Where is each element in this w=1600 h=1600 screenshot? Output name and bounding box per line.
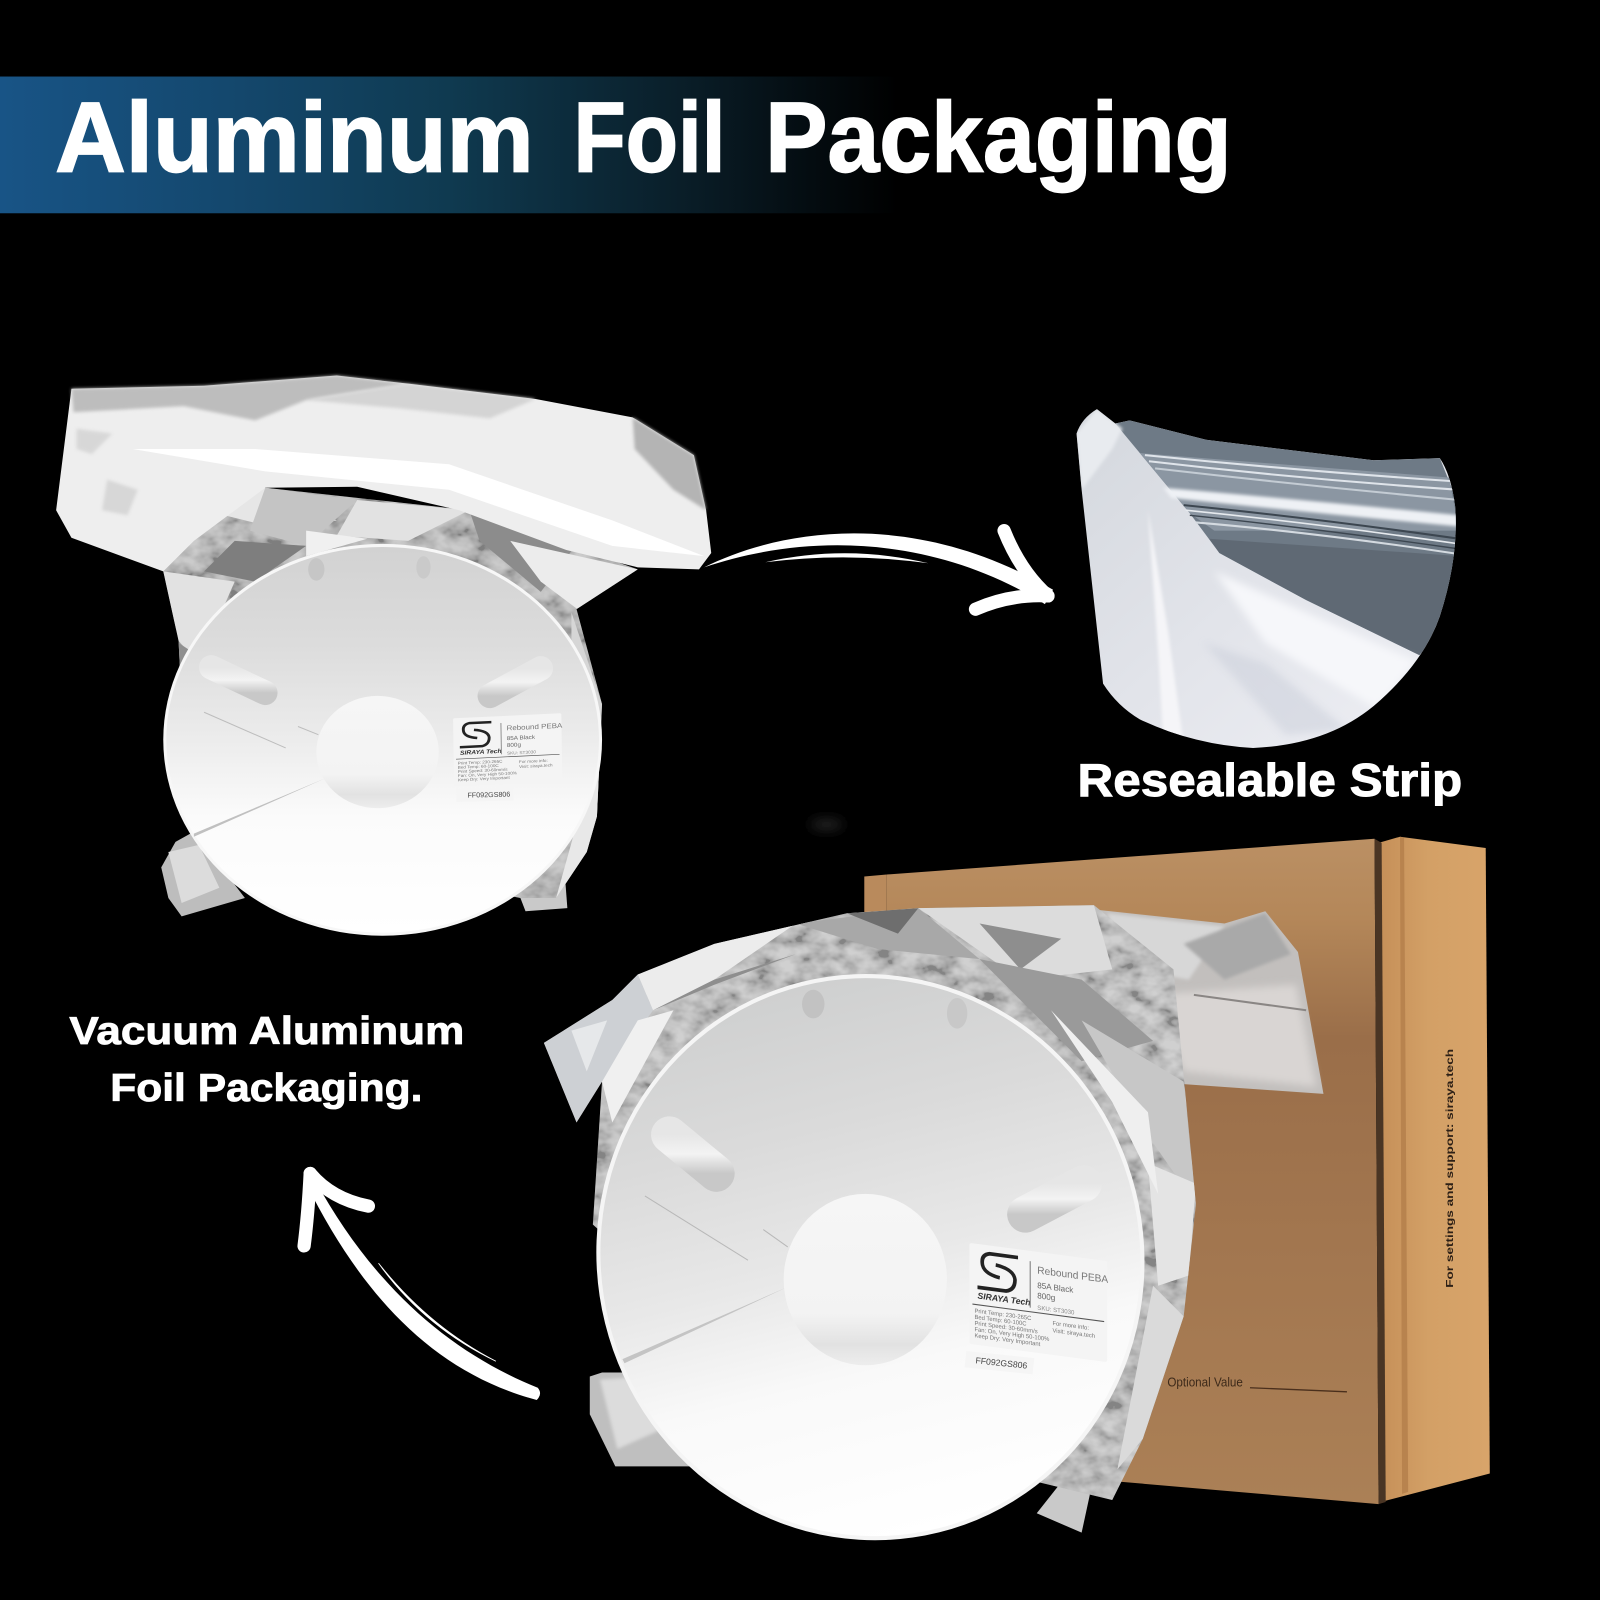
spool label: Visit: siraya.tech — [1052, 1328, 1095, 1340]
spool label: For more info: — [519, 758, 548, 764]
spool disc — [163, 544, 602, 936]
box side text: For settings and support: siraya.tech — [1445, 1049, 1456, 1288]
foil bottom tabs — [161, 832, 567, 916]
title: Foil — [573, 81, 726, 192]
batch sticker — [965, 1351, 1034, 1374]
spool label: Keep Dry: Very Important — [974, 1333, 1041, 1348]
spool label: Print Temp: 230-265C — [974, 1309, 1032, 1322]
crinkled foil body — [163, 488, 638, 898]
arrow: bag to resealable strip — [704, 531, 1053, 609]
spool label — [453, 713, 563, 786]
disc hub — [316, 696, 439, 808]
spool label: Rebound PEBA — [1037, 1265, 1108, 1286]
spool label: Print Speed: 30-60mm/s — [974, 1321, 1038, 1335]
spool label: Visit: siraya.tech — [519, 763, 553, 769]
caption: resealable strip: Resealable Strip — [1078, 754, 1462, 806]
spool label: Print Temp: 230-265C — [458, 759, 503, 766]
spool label: SKU: ST3030 — [507, 750, 537, 756]
foil bag top band — [56, 376, 711, 571]
cardboard box — [864, 837, 1490, 1504]
spool label: Keep Dry: Very Important — [458, 775, 511, 782]
disc hub — [784, 1194, 947, 1365]
spool label: SIRAYA Tech — [460, 748, 502, 757]
disc slots and dimples — [194, 556, 541, 837]
spool label: SIRAYA Tech — [977, 1291, 1031, 1308]
spool label: 85A Black — [1037, 1281, 1074, 1295]
title: Aluminum — [55, 81, 534, 192]
logo — [460, 722, 492, 747]
title — [55, 81, 1232, 192]
box form field — [1167, 1375, 1347, 1392]
spool label — [969, 1243, 1108, 1362]
foil bottom tabs — [590, 1372, 1090, 1533]
title: Packaging — [765, 81, 1232, 192]
product photo: spool in opened foil bag — [56, 376, 711, 936]
spool disc — [536, 916, 1204, 1599]
product photo: cardboard box with foil spool — [536, 837, 1490, 1599]
spool label: Bed Temp: 60-100C — [974, 1315, 1027, 1328]
logo — [977, 1252, 1018, 1293]
photo: resealable strip detail — [1071, 403, 1464, 755]
batch sticker: FF092GS806 — [975, 1355, 1028, 1371]
box form field: Optional Value — [1167, 1375, 1243, 1390]
caption: vacuum foil packaging: Foil Packaging. — [110, 1066, 422, 1110]
spool label: SKU: ST3030 — [1037, 1305, 1075, 1317]
caption: vacuum foil packaging: Vacuum Aluminum — [69, 1009, 464, 1053]
spool label: Bed Temp: 60-100C — [458, 763, 499, 770]
spool label: 85A Black — [507, 735, 535, 742]
batch sticker: FF092GS806 — [467, 791, 510, 800]
crinkled foil wrap — [541, 898, 1204, 1531]
foil flap over box — [1082, 908, 1323, 1094]
disc slots and dimples — [622, 990, 1084, 1363]
zip closure — [1115, 420, 1459, 655]
caption: vacuum foil packaging — [69, 1009, 464, 1110]
spool label: Print Speed: 30-60mm/s — [458, 767, 508, 774]
batch sticker — [456, 787, 514, 802]
spool label: 800g — [507, 743, 521, 749]
title banner — [0, 77, 1232, 213]
spool label: Fan: On, Very High 50-100% — [974, 1327, 1050, 1343]
arrow: spool back to caption — [304, 1173, 540, 1400]
spool label: Fan: On, Very High 50-100% — [458, 771, 517, 778]
spool label: Rebound PEBA — [507, 721, 562, 732]
spool label: For more info: — [1052, 1321, 1089, 1332]
spool label: 800g — [1037, 1291, 1056, 1303]
